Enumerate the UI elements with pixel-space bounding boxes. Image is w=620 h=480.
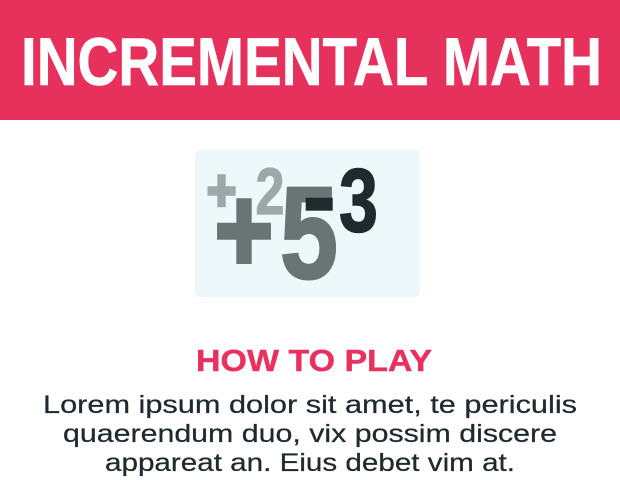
- body text: [43, 391, 577, 477]
- body text: appareat an. Eius debet vim at.: [105, 449, 515, 477]
- body text: Lorem ipsum dolor sit amet, te periculis: [43, 391, 577, 419]
- heading: how to play: HOW TO PLAY: [196, 343, 432, 378]
- icon: small plus: [208, 174, 236, 207]
- digit 3: 3: [339, 152, 378, 252]
- body text: quaerendum duo, vix possim discere: [63, 420, 557, 448]
- icon: large plus: [217, 198, 271, 264]
- digit 5: 5: [280, 159, 338, 306]
- panel: math illustration: [195, 150, 420, 306]
- digit 2: 2: [256, 154, 284, 228]
- minus sign: [306, 198, 333, 211]
- title banner: [0, 0, 620, 120]
